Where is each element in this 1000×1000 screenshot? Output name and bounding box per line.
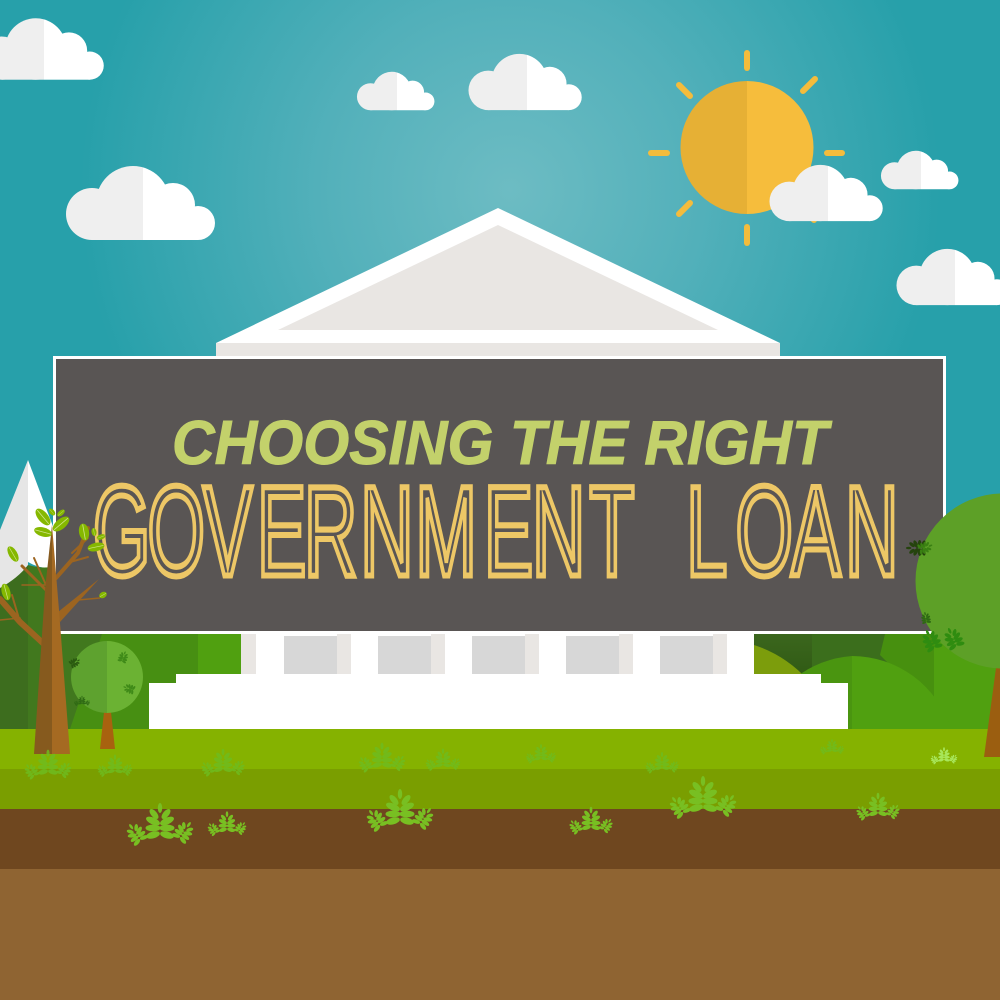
cloud: small right	[881, 151, 958, 189]
cloud: right edge	[896, 249, 1000, 305]
colonnade	[241, 632, 754, 674]
roof pediment	[216, 208, 780, 343]
cloud: small centre	[357, 72, 434, 110]
grass ferns on green band	[21, 739, 959, 781]
leaves	[0, 506, 108, 601]
steps	[149, 674, 848, 730]
trunk	[34, 525, 52, 754]
cloud: top left	[0, 18, 104, 80]
building	[149, 208, 848, 730]
title line two: GOVERNMENT LOAN	[93, 461, 899, 604]
title line one: CHOOSING THE RIGHT	[172, 409, 833, 478]
small tree	[68, 641, 143, 749]
green dome	[760, 656, 852, 729]
background hills right	[754, 634, 1000, 729]
title panel	[54, 358, 944, 632]
sun disc	[680, 81, 747, 214]
grass ferns on brown soil	[122, 776, 903, 848]
cloud: upper centre	[468, 54, 582, 110]
snow mountain	[0, 460, 60, 590]
branches	[0, 528, 88, 645]
ground bands	[0, 729, 1000, 1000]
entablature	[216, 343, 780, 357]
large left tree	[0, 506, 108, 754]
cloud: large left	[66, 166, 215, 240]
pediment inner	[278, 225, 718, 330]
sun	[651, 53, 842, 243]
sky background	[0, 0, 1000, 760]
large right tree	[906, 494, 1000, 757]
sun rays	[651, 53, 842, 243]
cloud: over sun	[769, 165, 883, 221]
background hills left	[0, 460, 242, 729]
